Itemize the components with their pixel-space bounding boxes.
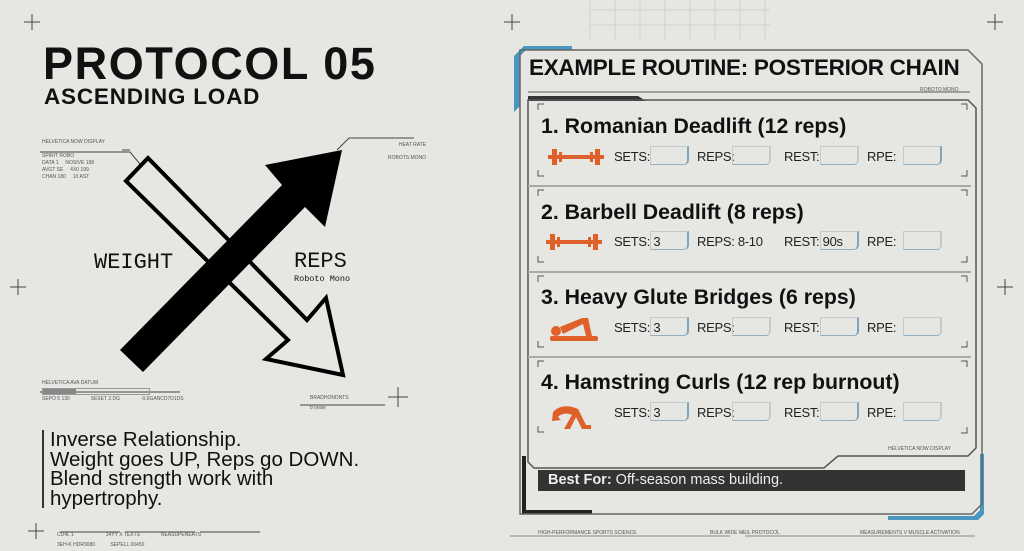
row 1: 1. Romanian Deadlift (12 reps) bbox=[541, 114, 846, 138]
text: BULK WIDE MEIL PROTOCOL bbox=[710, 530, 780, 536]
text: ROBOTO MONO bbox=[920, 87, 959, 93]
description text bbox=[42, 430, 390, 508]
text: HELVETICA AVA DATUM bbox=[42, 380, 98, 386]
label: weight: WEIGHT bbox=[94, 250, 173, 275]
row 3 bbox=[541, 285, 942, 341]
row 2: REPS: 8-10 bbox=[697, 234, 763, 249]
best for bar: Best For: Off-season mass building. bbox=[548, 472, 783, 488]
small labels left: DATA 1 NOSIVE 198 bbox=[42, 160, 94, 166]
row 1: SETS: bbox=[614, 149, 650, 164]
title: PROTOCOL 05 bbox=[43, 38, 377, 89]
small labels left bbox=[42, 139, 105, 180]
label: reps: REPS bbox=[294, 249, 347, 274]
text: MEASUREMENTS V MUSCLE ACTIVATION bbox=[860, 530, 960, 536]
description text: Weight goes UP, Reps go DOWN. bbox=[50, 448, 359, 470]
footer labels left: CD4L 1 14YY X TEXTS NEASUPENEATS bbox=[57, 532, 201, 538]
label: reps: Roboto Mono bbox=[294, 274, 350, 284]
description text: hypertrophy. bbox=[50, 486, 162, 510]
row 2: 2. Barbell Deadlift (8 reps) bbox=[541, 200, 804, 224]
row 4 bbox=[541, 370, 942, 429]
arrow: weight up bbox=[120, 150, 342, 372]
icon: glute bridge bbox=[550, 318, 598, 341]
text: HELVETICA NOW DISPLAY bbox=[888, 446, 951, 452]
row 3: RPE: bbox=[867, 320, 896, 335]
label: reps bbox=[294, 249, 350, 284]
description text: Blend strength work with bbox=[50, 467, 273, 490]
arrow: reps down bbox=[126, 158, 343, 375]
row 4: 4. Hamstring Curls (12 rep burnout) bbox=[541, 370, 900, 394]
panel title: EXAMPLE ROUTINE: POSTERIOR CHAIN bbox=[529, 55, 959, 80]
row 3: REST: bbox=[784, 320, 819, 335]
row 1: RPE: bbox=[867, 149, 896, 164]
text: SEPO 5 130 SESET 2.DG -0.6GANCD7D1DS bbox=[42, 396, 184, 402]
small labels left: HELVETICA NOW DISPLAY bbox=[42, 139, 105, 145]
row 3: 3. Heavy Glute Bridges (6 reps) bbox=[541, 285, 856, 309]
row 4: RPE: bbox=[867, 405, 896, 420]
row 3: SETS: 3 bbox=[614, 320, 660, 335]
text: BRADHONDNTS bbox=[310, 395, 349, 401]
panel: example routine bbox=[514, 46, 984, 520]
icon: barbell bbox=[546, 234, 602, 250]
row 1 bbox=[541, 114, 942, 165]
footer labels left bbox=[57, 532, 201, 548]
row 2 bbox=[541, 200, 942, 250]
best for bar bbox=[538, 470, 965, 491]
description text: Inverse Relationship. bbox=[50, 428, 241, 451]
subtitle: ASCENDING LOAD bbox=[44, 84, 260, 109]
row 2: REST: 90s bbox=[784, 234, 843, 249]
row 4: SETS: 3 bbox=[614, 405, 660, 420]
row 4: REST: bbox=[784, 405, 819, 420]
row 3: REPS: bbox=[697, 320, 735, 335]
text: ROBOTS MONO bbox=[388, 155, 426, 161]
footer labels left: 3EH-K HDR9080 SEPELL 00450 bbox=[57, 542, 144, 548]
arrows graphic bbox=[120, 150, 346, 378]
row 2: RPE: bbox=[867, 234, 896, 249]
small labels left: SPIRIT ROBO bbox=[42, 153, 74, 159]
row 4: REPS: bbox=[697, 405, 735, 420]
icon: hamstring curl bbox=[552, 406, 591, 429]
icon: barbell bbox=[548, 149, 604, 165]
row 1: REST: bbox=[784, 149, 819, 164]
footer labels right: HIGH-PERFORMANCE SPORTS SCIENCE bbox=[538, 530, 637, 536]
row 1: REPS: bbox=[697, 149, 735, 164]
small labels left: CHAN 180 10 AST bbox=[42, 174, 89, 180]
text: 8 ovise bbox=[310, 405, 326, 411]
row 2: SETS: 3 bbox=[614, 234, 660, 249]
small labels left: AVGT SE 4X0 199 bbox=[42, 167, 89, 173]
text: HEAT RATE bbox=[399, 142, 426, 148]
